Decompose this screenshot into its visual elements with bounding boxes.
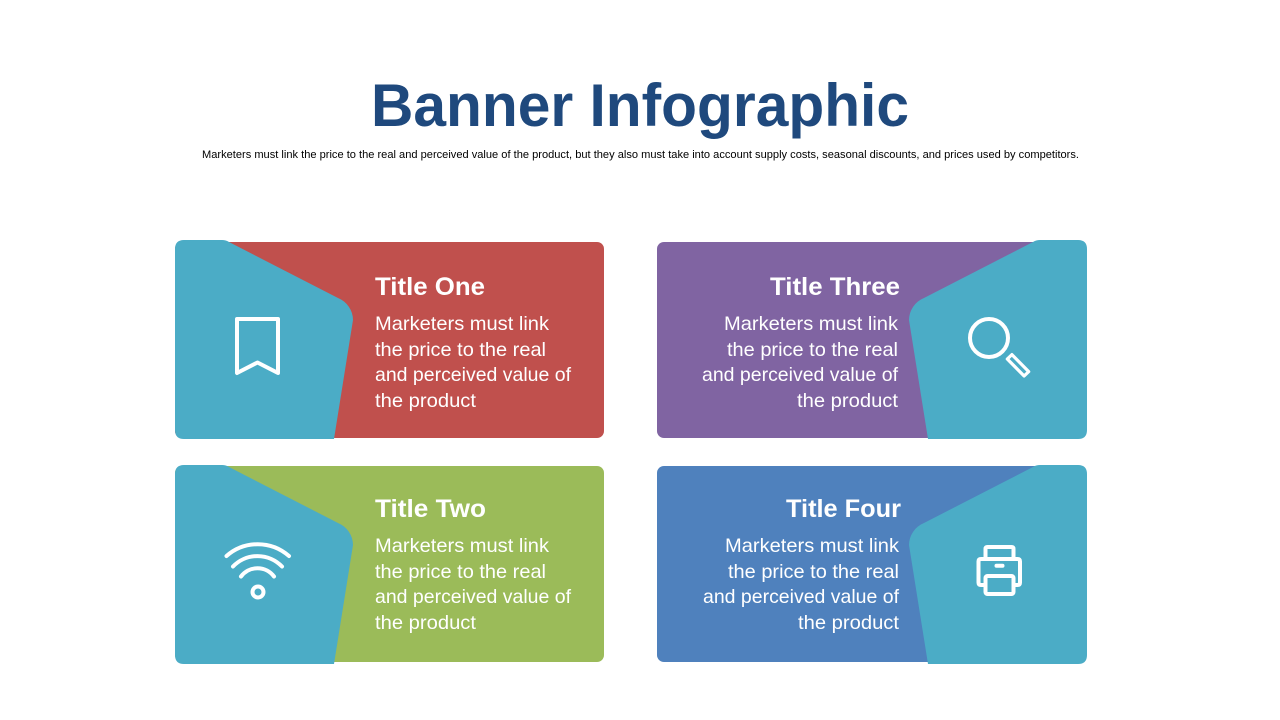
- text block: title two: Marketers must link: [375, 535, 549, 557]
- heading: title four: Title Four: [786, 495, 901, 523]
- banner shape: right: [909, 240, 1087, 439]
- panel: title two: [175, 465, 604, 664]
- heading: title two: Title Two: [375, 495, 486, 523]
- text block: title four: [703, 535, 900, 634]
- card background: red: [175, 242, 604, 438]
- text block: title two: the product: [375, 612, 477, 634]
- text block: title one: the product: [375, 390, 477, 412]
- panel: title four: [657, 465, 1087, 664]
- text block: title two: and perceived value of: [375, 586, 572, 608]
- text block: title one: and perceived value of: [375, 364, 572, 386]
- text block: title three: and perceived value of: [702, 364, 899, 386]
- text block: title four: and perceived value of: [703, 586, 900, 608]
- text block: title one: Marketers must link: [375, 313, 549, 335]
- card background: green: [175, 466, 604, 662]
- heading: title one: Title One: [375, 273, 485, 301]
- icon: wifi: [226, 544, 289, 598]
- icon: magnifier: [970, 319, 1029, 376]
- text block: title three: [702, 313, 899, 412]
- title: Banner Infographic: [371, 72, 909, 139]
- banner shape: right: [909, 465, 1087, 664]
- text block: title three: the product: [797, 390, 899, 412]
- card background: purple: [657, 242, 1086, 438]
- banner shape: left: [175, 240, 353, 439]
- text block: title one: [375, 313, 572, 412]
- icon: printer: [978, 547, 1020, 594]
- text block: title two: [375, 535, 572, 634]
- icon: bookmark: [237, 319, 278, 373]
- text block: title four: Marketers must link: [725, 535, 899, 557]
- heading: title three: Title Three: [770, 273, 900, 301]
- card background: blue: [657, 466, 1086, 662]
- text block: title four: the price to the real: [728, 561, 899, 583]
- text block: title four: the product: [798, 612, 900, 634]
- text block: title two: the price to the real: [375, 561, 546, 583]
- banner shape: left: [175, 465, 353, 664]
- panel: title one: [175, 240, 604, 439]
- text block: title three: Marketers must link: [724, 313, 898, 335]
- panel: title three: [657, 240, 1087, 439]
- text block: title three: the price to the real: [727, 339, 898, 361]
- text block: title one: the price to the real: [375, 339, 546, 361]
- subtitle: Marketers must link the price to the real and perceived value of the product, but they also must take into account supply costs, seasonal discounts, and prices used by competitors.: [202, 149, 1079, 161]
